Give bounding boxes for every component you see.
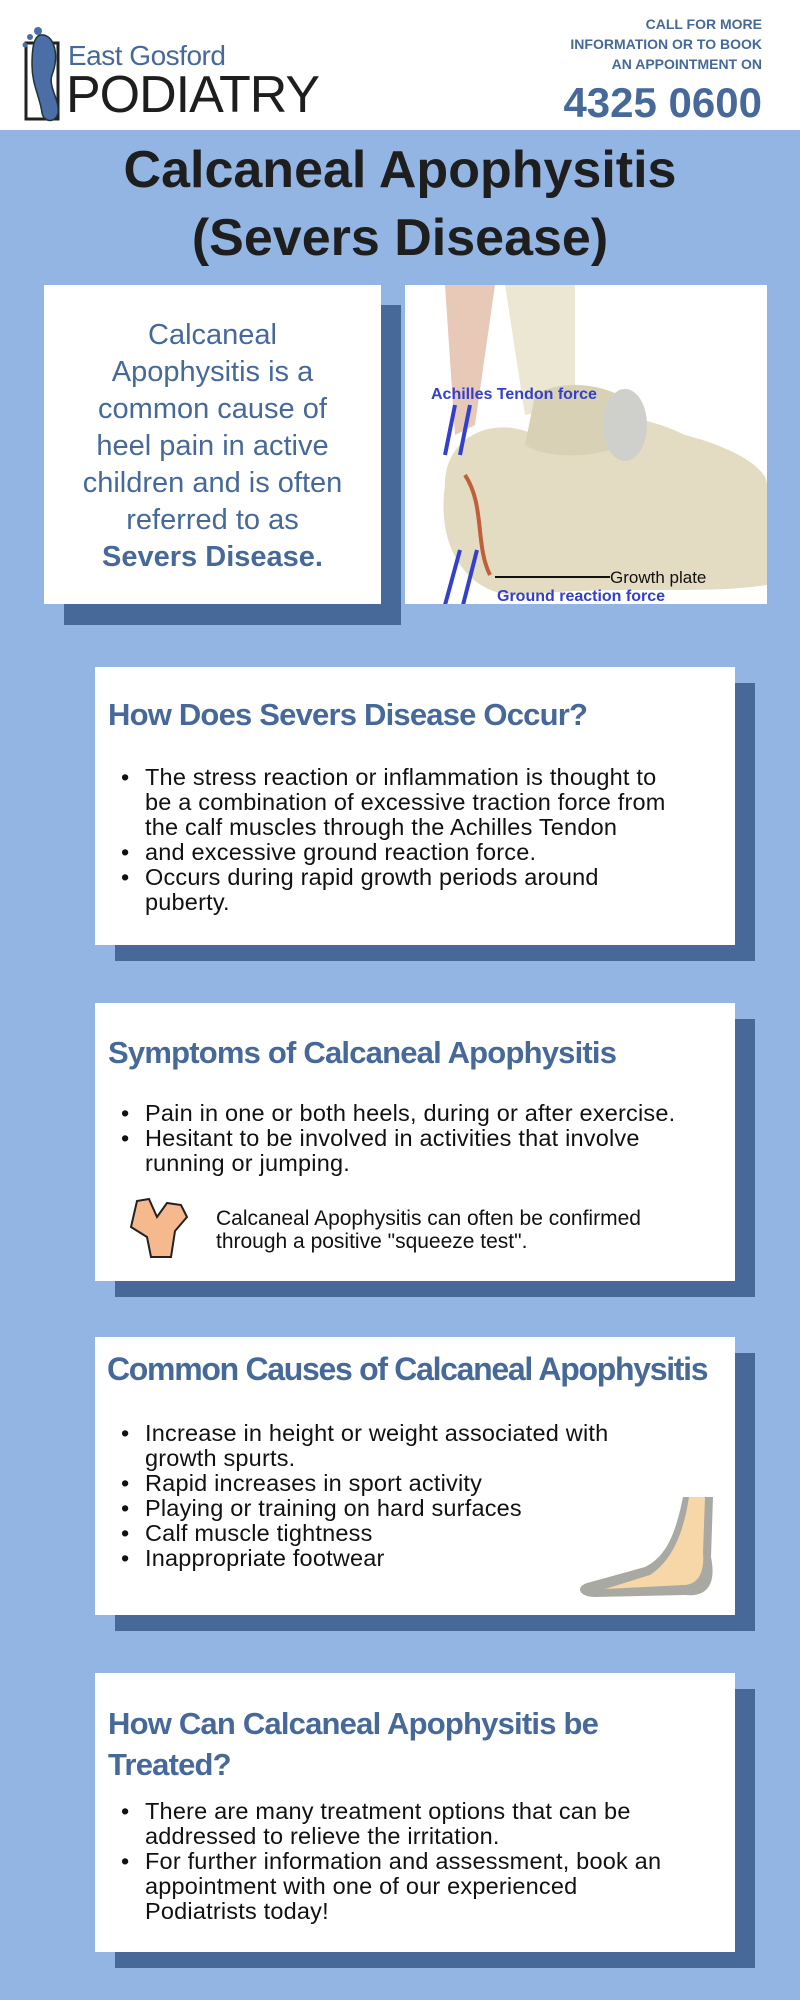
squeeze note: Calcaneal Apophysitis can often be confirmed [216, 1207, 641, 1230]
panel: treatment [95, 1673, 755, 1968]
squeeze note: through a positive "squeeze test". [216, 1230, 527, 1253]
bullets: Playing or training on hard surfaces [145, 1495, 522, 1521]
panel: how does it occur [95, 667, 755, 961]
panel: causes [95, 1337, 755, 1631]
intro text: Calcaneal [148, 319, 277, 351]
bullets: Increase in height or weight associated with [145, 1420, 608, 1446]
logo [22, 27, 319, 124]
bullets: and excessive ground reaction force. [145, 839, 536, 865]
bullets: There are many treatment options that can be [145, 1798, 631, 1824]
bullets: For further information and assessment, book an [145, 1848, 661, 1874]
logo: PODIATRY [66, 66, 319, 124]
bullets: Inappropriate footwear [145, 1545, 385, 1571]
contact: CALL FOR MORE [646, 16, 762, 32]
bullets: Rapid increases in sport activity [145, 1470, 482, 1496]
header [0, 0, 800, 130]
bullets: growth spurts. [145, 1445, 295, 1471]
squeeze note [216, 1207, 641, 1253]
heading: How Does Severs Disease Occur? [108, 697, 587, 732]
bullets: addressed to relieve the irritation. [145, 1823, 500, 1849]
bullets [122, 764, 666, 915]
intro text: Severs Disease. [102, 541, 323, 573]
bullets: Podiatrists today! [145, 1898, 329, 1924]
bullets: Pain in one or both heels, during or after exercise. [145, 1100, 675, 1126]
bullets [122, 1420, 608, 1571]
title: (Severs Disease) [192, 209, 608, 267]
contact: AN APPOINTMENT ON [612, 56, 762, 72]
bullets: be a combination of excessive traction force from [145, 789, 666, 815]
bullets [122, 1798, 661, 1924]
heading: Common Causes of Calcaneal Apophysitis [107, 1351, 707, 1387]
heading: Symptoms of Calcaneal Apophysitis [108, 1035, 616, 1070]
bullets [122, 1100, 675, 1176]
logo: East Gosford [68, 40, 225, 71]
intro text [44, 285, 381, 604]
heading [108, 1706, 598, 1782]
image: heel anatomy: Achilles Tendon force [431, 386, 597, 403]
image: heel anatomy [405, 285, 767, 604]
bullets: the calf muscles through the Achilles Tendon [145, 814, 617, 840]
heading: Treated? [108, 1747, 231, 1782]
bullets: puberty. [145, 889, 230, 915]
title [124, 141, 676, 267]
icon: foot [22, 27, 60, 122]
bullets: Occurs during rapid growth periods around [145, 864, 599, 890]
bullets: running or jumping. [145, 1150, 350, 1176]
contact: 4325 0600 [563, 79, 762, 126]
contact: INFORMATION OR TO BOOK [570, 36, 762, 52]
contact [563, 16, 762, 126]
icon: foot skeleton [580, 1497, 713, 1597]
title: Calcaneal Apophysitis [124, 141, 676, 199]
intro text: referred to as [126, 504, 299, 536]
bullets: appointment with one of our experienced [145, 1873, 577, 1899]
image: heel anatomy: Growth plate [610, 568, 706, 587]
bullets: The stress reaction or inflammation is thought to [145, 764, 656, 790]
bullets: Hesitant to be involved in activities that involve [145, 1125, 640, 1151]
intro text: Apophysitis is a [112, 356, 313, 388]
bullets: Calf muscle tightness [145, 1520, 373, 1546]
icon: squeeze test hand [130, 1198, 188, 1258]
intro text: heel pain in active [96, 430, 329, 462]
intro text: children and is often [83, 467, 342, 499]
intro panel [44, 285, 401, 625]
heading: How Can Calcaneal Apophysitis be [108, 1706, 598, 1741]
intro text: common cause of [98, 393, 327, 425]
panel: symptoms [95, 1003, 755, 1297]
